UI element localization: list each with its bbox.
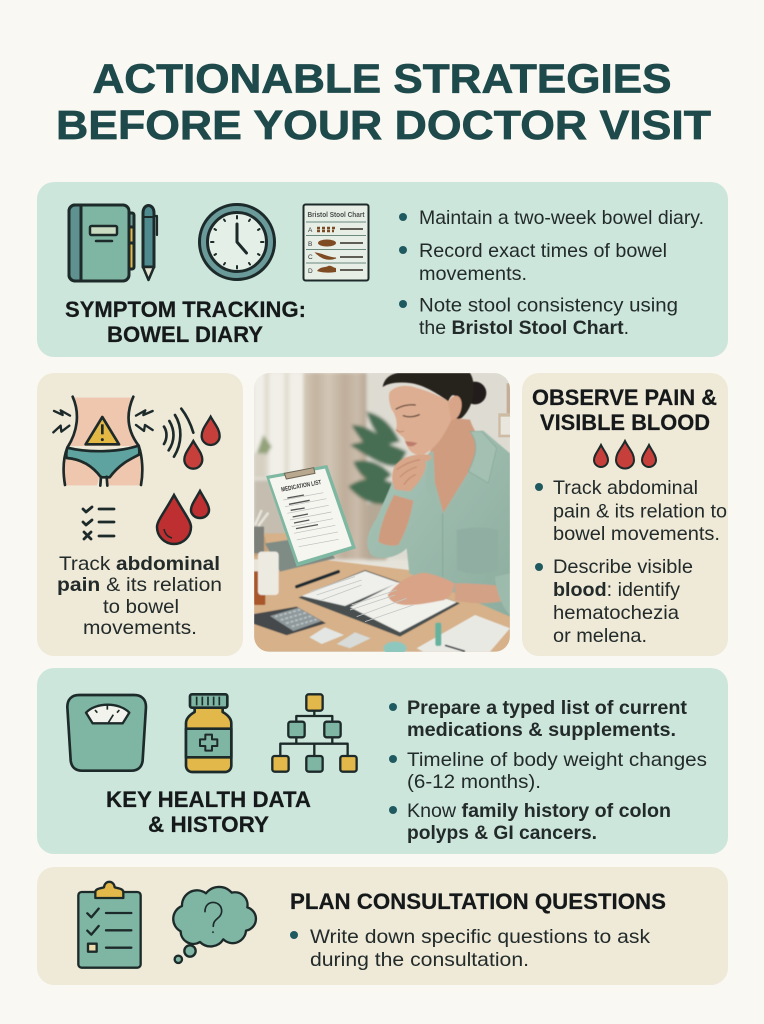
neck and chest (425, 418, 497, 513)
text: abdominal pain: to bowel (103, 596, 179, 618)
icon: abdomen with warning (53, 397, 220, 486)
icon: bristol stool chart: D (308, 268, 313, 275)
heading: observe pain (532, 385, 717, 435)
heading: key health data (106, 787, 311, 837)
icon: clock (200, 204, 274, 280)
pill blisters (309, 627, 344, 644)
icon: bristol stool chart: Bristol Stool Chart (308, 210, 365, 219)
bullet list: pain and blood: bowel movements. (553, 523, 720, 545)
title: ACTIONABLE STRATEGIES (92, 56, 672, 102)
title (56, 56, 711, 148)
clipboard (266, 465, 356, 567)
heading: key health data: KEY HEALTH DATA (106, 787, 311, 812)
heading: symptom tracking: BOWEL DIARY (107, 322, 263, 347)
icon: family tree (272, 694, 357, 772)
photo: woman reviewing medication list at desk: MEDICATION LIST (281, 479, 322, 494)
heading: observe pain: OBSERVE PAIN & (532, 385, 717, 410)
icon: thought cloud with question mark (173, 887, 256, 963)
desk (254, 533, 510, 652)
bullet list: health data: Timeline of body weight changes (407, 749, 707, 771)
bullet list: health data: polyps & GI cancers. (407, 822, 597, 844)
heading: plan consultation questions: PLAN CONSULTATION QUESTIONS (290, 889, 666, 914)
calculator (254, 607, 326, 635)
icon: medicine bottle (186, 694, 231, 772)
teal cap (382, 641, 407, 652)
bullet: write questions: Write down specific questions to ask (310, 926, 650, 948)
bullet list: pain and blood: blood: identify (553, 579, 680, 601)
heading: symptom tracking: SYMPTOM TRACKING: (65, 297, 306, 322)
bullet list: pain and blood: pain & its relation to (553, 500, 727, 522)
panel: symptom tracking (37, 182, 728, 357)
bullet: write questions: during the consultation. (310, 949, 529, 971)
bullet list: health data: Know family history of colon (407, 800, 671, 822)
panel: abdominal pain (37, 373, 243, 656)
panel: consultation questions (37, 867, 728, 985)
icon: clipboard checklist (78, 882, 141, 968)
icon: pen (143, 206, 157, 280)
text: abdominal pain: movements. (83, 617, 197, 639)
forearm on book (455, 583, 510, 603)
bullet list: diary: the Bristol Stool Chart. (419, 317, 629, 339)
bullet list: pain and blood: hematochezia (553, 602, 679, 624)
text: abdominal pain: pain & its relation (57, 574, 222, 596)
bullet list: health data: medications & supplements. (407, 719, 676, 741)
icon: three blood drops (594, 441, 656, 469)
forearm raised (378, 495, 413, 546)
icon: bristol stool chart (304, 204, 368, 280)
bullet list: diary: Maintain a two-week bowel diary. (419, 207, 704, 229)
pen (297, 572, 338, 587)
bullet list: pain and blood: or melena. (553, 625, 647, 647)
icon: blood drops (157, 491, 209, 544)
bullet list: diary: Record exact times of bowel (419, 240, 667, 262)
text: abdominal pain (57, 553, 222, 639)
icon: bristol stool chart: C (308, 254, 313, 261)
icon: checklist (83, 507, 114, 539)
heading: symptom tracking (65, 297, 306, 347)
bullet list: diary: movements. (419, 263, 527, 285)
shirt (367, 431, 510, 617)
bullet list: health data (389, 697, 707, 844)
notepad (417, 615, 510, 652)
bullet list: health data: (6-12 months). (407, 771, 541, 793)
bullet list: diary (399, 207, 704, 339)
text: abdominal pain: Track abdominal (59, 553, 220, 575)
icon: weighing scale (67, 695, 146, 771)
title: BEFORE YOUR DOCTOR VISIT (56, 102, 711, 148)
bullet list: pain and blood: Describe visible (553, 556, 693, 578)
photo: woman reviewing medication list at desk (254, 373, 511, 655)
bullet list: pain and blood: Track abdominal (553, 477, 698, 499)
panel: observe pain and blood (522, 373, 728, 656)
hand, face and hair (383, 373, 486, 491)
icon: bristol stool chart: B (308, 241, 312, 248)
icon: bristol stool chart: A (308, 227, 313, 234)
open book (298, 570, 460, 637)
bullet: write questions (290, 926, 650, 971)
holder and bottles (254, 527, 264, 553)
heading: observe pain: VISIBLE BLOOD (540, 410, 710, 435)
bullet list: health data: Prepare a typed list of current (407, 697, 688, 719)
panel: key health data (37, 668, 728, 854)
bullet list: diary: Note stool consistency using (419, 294, 678, 316)
bullet list: pain and blood (535, 477, 727, 647)
icon: notebook (69, 205, 134, 281)
heading: key health data: & HISTORY (148, 812, 269, 837)
